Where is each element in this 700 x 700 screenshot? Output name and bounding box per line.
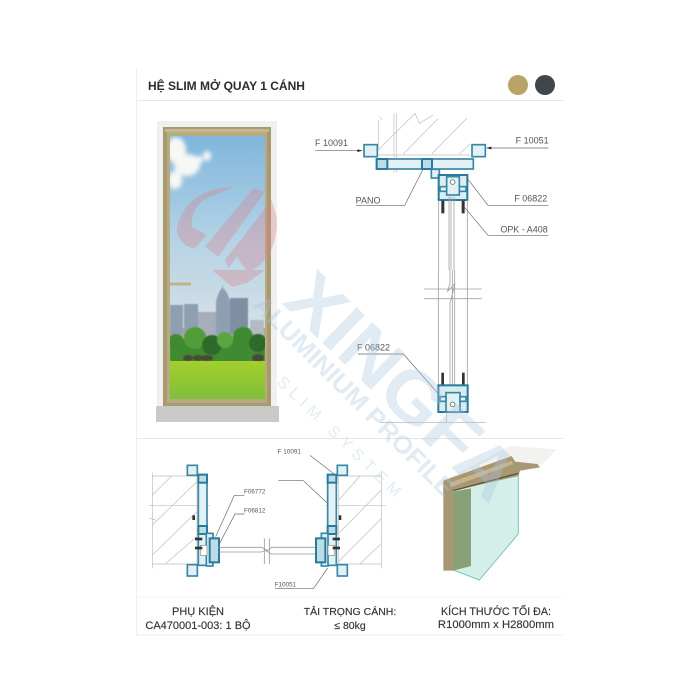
leader F 10091: F 10091 (315, 138, 348, 148)
leader OPK - A408 (464, 207, 548, 235)
wall (149, 473, 210, 568)
fasteners (192, 515, 202, 549)
caption: accessories: PHỤ KIỆN (172, 605, 224, 618)
red logo (177, 187, 277, 273)
door profile F 06822 bottom (438, 385, 468, 412)
title: HỆ SLIM MỞ QUAY 1 CÁNH (148, 78, 305, 93)
caption: maximum size (438, 604, 554, 631)
leader F 10051 (486, 135, 549, 149)
label F06812 (220, 507, 266, 543)
colour swatch: dark grey (535, 75, 555, 95)
plan section: right jamb (316, 465, 386, 576)
label F06772 (216, 489, 266, 537)
glass lines (439, 197, 467, 270)
leader PANO (356, 170, 423, 206)
caption: maximum size: R1000mm x H2800mm (438, 619, 554, 631)
profile F 10051 (472, 145, 485, 157)
red logo lower (212, 270, 265, 287)
3D corner view (443, 446, 557, 580)
label F06772: F06772 (244, 489, 266, 496)
frame profiles (187, 465, 219, 576)
leader F 06822: F 06822 (357, 343, 390, 353)
door profile F 06822 top (439, 175, 467, 213)
label F 10091: F 10091 (278, 448, 301, 455)
floor line (380, 412, 486, 422)
door photo (166, 136, 267, 399)
leader PANO: PANO (356, 196, 380, 206)
glass lines and break (424, 270, 482, 385)
top section drawing (315, 113, 549, 270)
caption: leaf load (304, 605, 396, 632)
XINGFA: XINGFA (270, 257, 535, 517)
stone sill (156, 406, 279, 422)
wall hatching (378, 113, 470, 173)
label F06812: F06812 (244, 507, 266, 514)
label F10051 (275, 568, 328, 588)
watermark (177, 187, 535, 517)
label F10051: F10051 (275, 581, 297, 588)
transom frame (377, 159, 473, 178)
top profile (443, 456, 540, 493)
ALUMINIUM PROFILE: ALUMINIUM PROFILE (248, 290, 460, 503)
caption: leaf load: TẢI TRỌNG CÁNH: (304, 605, 396, 618)
glass pane (218, 538, 316, 564)
caption: leaf load: ≤ 80kg (334, 620, 366, 632)
label F 10091 (278, 448, 335, 503)
wall (325, 473, 386, 568)
colour swatch: gold (508, 75, 528, 95)
leader OPK - A408: OPK - A408 (500, 225, 548, 235)
SLIM SYSTEM: SLIM SYSTEM (273, 374, 404, 500)
leader F 06822 (357, 343, 437, 393)
panel outline (136, 68, 563, 635)
plan section: left jamb (149, 448, 335, 588)
leader F 06822 (468, 179, 548, 205)
caption: maximum size: KÍCH THƯỚC TỐI ĐA: (441, 604, 551, 618)
bottom section drawing (357, 270, 486, 422)
glass pane (453, 475, 518, 580)
profile F 10091 (364, 145, 377, 157)
leader F 06822: F 06822 (514, 194, 547, 204)
caption: accessories: CA470001-003: 1 BỘ (145, 619, 251, 632)
door handle (170, 282, 191, 286)
vertical jamb (443, 481, 453, 571)
leader F 10091 (315, 138, 363, 152)
caption: accessories (145, 605, 251, 632)
white wall top (443, 446, 557, 482)
leader F 10051: F 10051 (516, 135, 549, 145)
fasteners (333, 515, 341, 549)
door illustration (157, 121, 277, 406)
gaskets (441, 373, 465, 386)
frame profiles (316, 465, 347, 576)
